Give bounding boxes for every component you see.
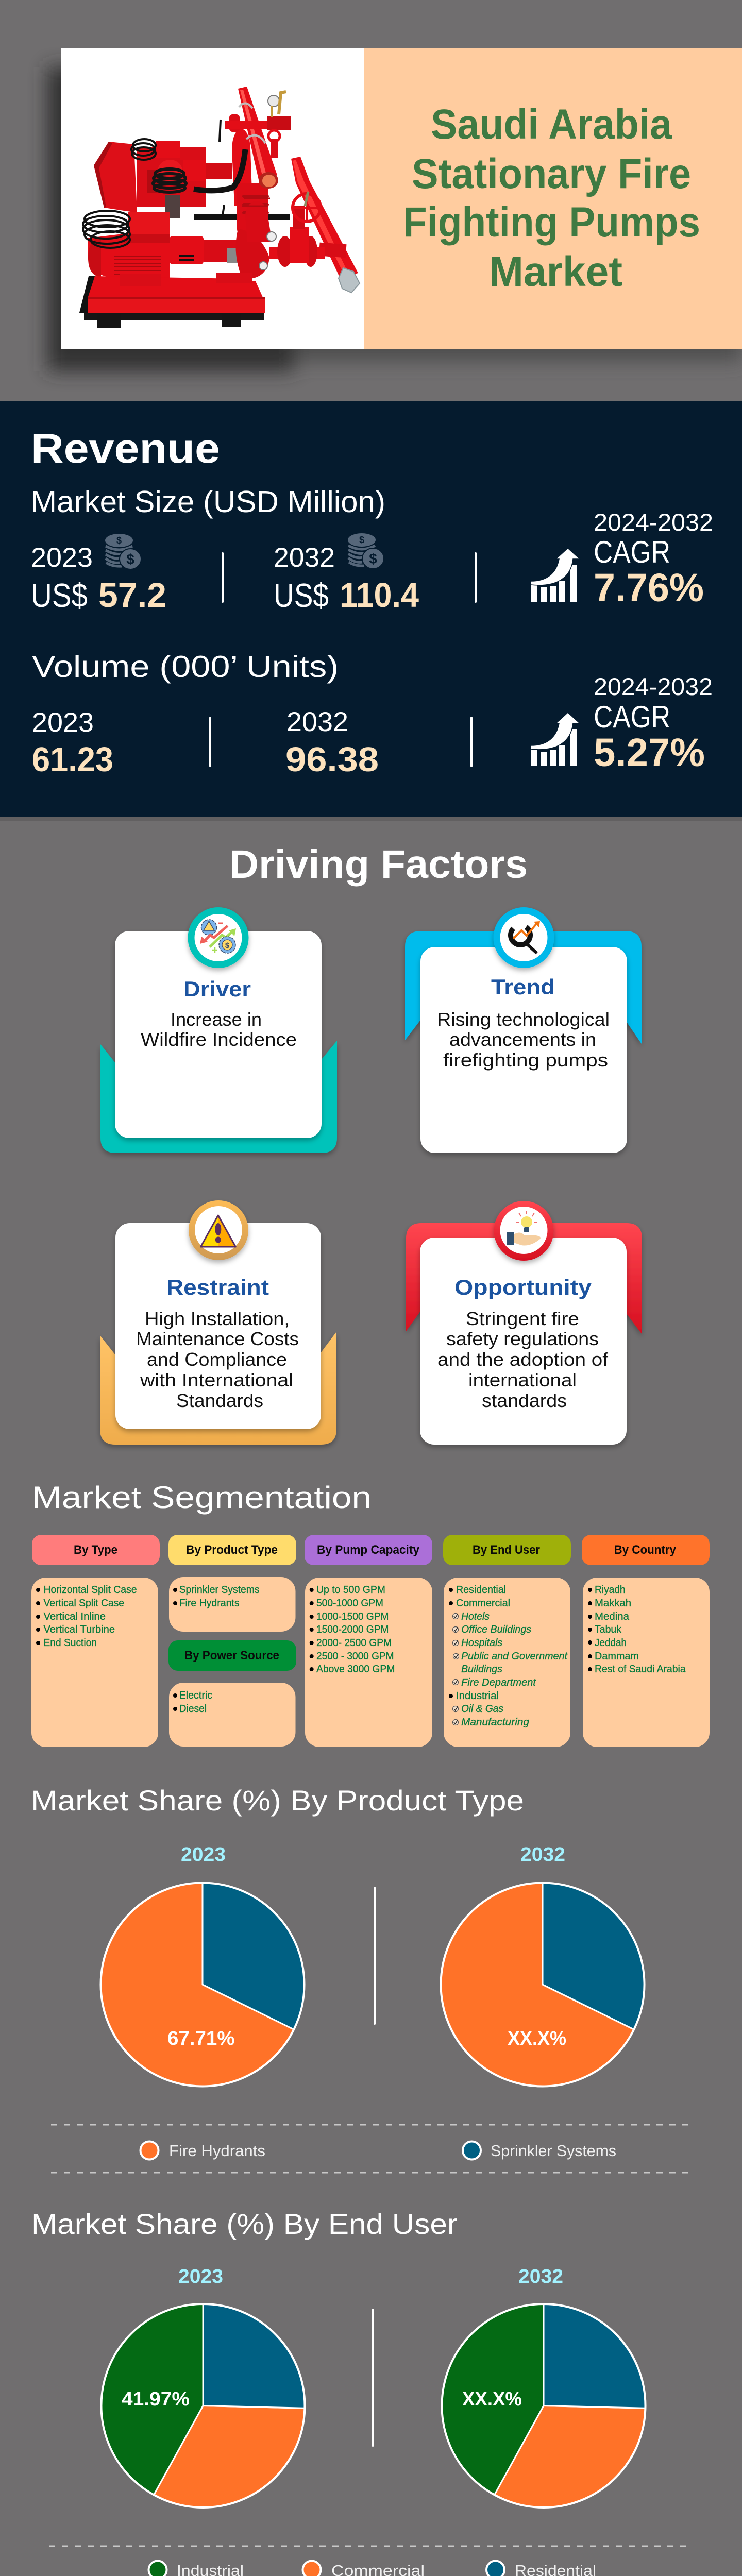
title text: Stationary Fire	[412, 150, 691, 197]
panel: by product type	[168, 1535, 296, 1632]
icon: trend	[494, 907, 554, 968]
title text: Fighting Pumps	[403, 199, 700, 246]
list: capacity items: Up to 500 GPM	[316, 1584, 385, 1596]
card text: Increase in	[171, 1009, 262, 1030]
stat: volume 2023: 2023	[32, 707, 94, 738]
list: power items: Electric	[179, 1690, 212, 1701]
card title: Opportunity	[454, 1275, 592, 1299]
stat: revenue CAGR: CAGR	[594, 535, 670, 569]
stat: volume 2032: 2032	[286, 707, 348, 737]
card text	[141, 1009, 297, 1050]
card title: Driver	[183, 977, 251, 1001]
icon: coins: $	[369, 551, 377, 567]
list: capacity items: 500-1000 GPM	[316, 1598, 383, 1609]
stat: revenue CAGR: 2024-2032	[594, 509, 713, 536]
chart: product type 2023	[101, 1844, 304, 2086]
header label: By Country	[614, 1543, 677, 1557]
chart: product type 2032	[441, 1844, 644, 2086]
stat: market size 2023: US$	[31, 577, 88, 614]
pie	[442, 2304, 645, 2507]
card text: safety regulations	[446, 1328, 599, 1349]
card text: and the adoption of	[437, 1349, 609, 1370]
list: power items	[173, 1690, 212, 1715]
header label: By Type	[74, 1543, 117, 1557]
list: power items: Diesel	[179, 1703, 207, 1715]
stat: volume 2023: 61.23	[32, 740, 113, 779]
card text: firefighting pumps	[443, 1049, 608, 1071]
heading: market size: Market Size (USD Million)	[31, 485, 385, 519]
list: type items: Vertical Turbine	[43, 1624, 115, 1635]
panel: driver	[100, 907, 337, 1153]
heading: driving factors: Driving Factors	[229, 842, 528, 887]
card text: with International	[140, 1369, 293, 1391]
list: country items: Dammam	[595, 1651, 639, 1662]
list: product items: Sprinkler Systems	[179, 1584, 260, 1596]
stat: volume CAGR: 2024-2032	[594, 673, 713, 700]
panel: restraint	[100, 1200, 336, 1445]
heading: market share by product type: Market Share (%) By Product Type	[31, 1784, 524, 1817]
card text: international	[468, 1369, 577, 1391]
list: end user items: Oil & Gas	[461, 1703, 503, 1715]
heading: volume: Volume (000’ Units)	[32, 650, 339, 684]
list: product items	[173, 1584, 260, 1609]
value label: XX.X%	[508, 2028, 566, 2049]
icon: growth chart	[531, 548, 580, 602]
title panel	[364, 48, 742, 349]
list: country items: Jeddah	[595, 1637, 627, 1649]
list: country items: Rest of Saudi Arabia	[595, 1664, 686, 1675]
product photo panel	[61, 48, 364, 349]
heading: revenue: Revenue	[31, 426, 220, 472]
card text	[437, 1009, 610, 1071]
stat: market size 2023: 2023	[31, 543, 93, 573]
title text: Market	[489, 248, 622, 295]
list: type items: Vertical Split Case	[43, 1598, 124, 1609]
card text	[136, 1308, 299, 1411]
chart: end user 2032	[442, 2266, 645, 2507]
pie	[441, 1883, 644, 2086]
icon: driver: $	[225, 941, 230, 950]
card text: standards	[482, 1390, 567, 1411]
list: country items: Riyadh	[595, 1584, 626, 1596]
stat: market size 2032: 110.4	[340, 576, 419, 615]
panel: revenue	[0, 401, 742, 817]
list: end user items: Industrial	[456, 1690, 499, 1702]
value label: 67.71%	[167, 2028, 235, 2049]
list: capacity items: 2000- 2500 GPM	[316, 1637, 392, 1649]
stat: revenue CAGR	[594, 509, 713, 610]
card text: Maintenance Costs	[136, 1328, 299, 1349]
list: country items: Tabuk	[595, 1624, 622, 1635]
heading: market segmentation: Market Segmentation	[32, 1480, 372, 1515]
list: type items	[36, 1584, 137, 1649]
stat: revenue CAGR: 7.76%	[594, 566, 704, 610]
header label: By Pump Capacity	[317, 1543, 420, 1557]
card text: advancements in	[449, 1029, 596, 1050]
year label: 2023	[181, 1844, 226, 1866]
list: type items: Vertical Inline	[43, 1611, 106, 1622]
stat: volume CAGR	[594, 673, 713, 775]
icon: coins	[348, 533, 384, 569]
year label: 2023	[178, 2266, 223, 2287]
list: end user items: Residential	[456, 1584, 506, 1596]
title text: Saudi Arabia	[431, 101, 672, 148]
legend: product type: Sprinkler Systems	[491, 2142, 616, 2160]
pie	[102, 2304, 305, 2507]
stat: market size 2032: US$	[274, 577, 329, 614]
hero banner	[47, 48, 742, 371]
card text: Rising technological	[437, 1009, 610, 1030]
list: end user items: Office Buildings	[461, 1624, 531, 1635]
list: type items: End Suction	[43, 1637, 97, 1649]
header label: By End User	[473, 1543, 540, 1557]
year label: 2032	[520, 1844, 565, 1866]
list: end user items: Public and Government	[461, 1651, 568, 1662]
list: type items: Horizontal Split Case	[43, 1584, 137, 1596]
icon: coins: $	[359, 535, 364, 545]
panel: by pump capacity	[305, 1535, 432, 1747]
hero shadow	[47, 67, 742, 371]
panel: by power source	[168, 1640, 296, 1747]
stat: volume CAGR: 5.27%	[594, 731, 705, 775]
stat: market size 2023: 57.2	[98, 576, 166, 615]
year label: 2032	[518, 2266, 563, 2287]
header label: By Power Source	[184, 1649, 279, 1663]
value label: XX.X%	[462, 2388, 522, 2410]
divider	[209, 717, 211, 767]
icon: coins	[105, 534, 141, 569]
panel: by end user	[443, 1535, 571, 1747]
list: end user items: Hotels	[461, 1611, 490, 1622]
icon: restraint	[189, 1200, 248, 1260]
panel: trend	[405, 907, 642, 1153]
divider	[372, 2309, 374, 2447]
divider	[374, 1887, 376, 2025]
list: end user items: Hospitals	[461, 1637, 502, 1649]
stat: market size 2023	[31, 534, 166, 615]
list: capacity items: 2500 - 3000 GPM	[316, 1651, 394, 1662]
list: capacity items: Above 3000 GPM	[316, 1664, 395, 1675]
list: capacity items: 1500-2000 GPM	[316, 1624, 389, 1635]
list: end user items	[449, 1584, 568, 1728]
divider	[475, 552, 477, 603]
card text: Stringent fire	[466, 1308, 579, 1329]
stat: volume 2032: 96.38	[285, 740, 379, 779]
list: end user items: Fire Department	[461, 1677, 536, 1688]
list: country items: Makkah	[595, 1598, 631, 1609]
card text	[437, 1308, 609, 1411]
stat: volume 2032	[285, 707, 379, 779]
legend: end user	[148, 2561, 596, 2576]
list: end user items: Buildings	[461, 1664, 502, 1675]
stat: volume CAGR: CAGR	[594, 700, 670, 734]
list: product items: Fire Hydrants	[179, 1598, 240, 1609]
panel: by type	[31, 1535, 160, 1747]
panel: opportunity	[406, 1201, 642, 1445]
stat: market size 2032: 2032	[274, 543, 335, 573]
illustration: red fire pump skid	[79, 87, 360, 328]
panel: by country	[582, 1535, 710, 1747]
header label: By Product Type	[186, 1543, 278, 1557]
title text	[403, 101, 700, 295]
card text: and Compliance	[147, 1349, 287, 1370]
list: end user items: Commercial	[456, 1598, 510, 1609]
card text: Wildfire Incidence	[141, 1029, 297, 1050]
icon: opportunity	[494, 1201, 553, 1261]
icon: driver	[188, 907, 248, 968]
legend: product type	[140, 2141, 616, 2160]
card title: Restraint	[166, 1275, 269, 1299]
list: country items: Medina	[595, 1611, 630, 1622]
stat: market size 2032	[274, 533, 419, 615]
divider	[470, 717, 473, 767]
list: end user items: Manufacturing	[461, 1717, 529, 1728]
heading: market share by end user: Market Share (%) By End User	[31, 2208, 458, 2240]
icon: coins: $	[126, 551, 134, 567]
stat: volume 2023	[32, 707, 113, 779]
value label: 41.97%	[122, 2388, 190, 2410]
list: country items	[588, 1584, 686, 1675]
card title: Trend	[491, 975, 555, 999]
icon: coins: $	[116, 535, 122, 546]
list: capacity items	[310, 1584, 395, 1675]
icon: growth chart	[531, 713, 580, 766]
pie	[101, 1883, 304, 2086]
divider	[222, 552, 224, 603]
list: capacity items: 1000-1500 GPM	[316, 1611, 389, 1622]
card text: Standards	[176, 1390, 263, 1411]
legend: product type: Fire Hydrants	[169, 2142, 265, 2160]
card text: High Installation,	[145, 1308, 290, 1329]
chart: end user 2023	[102, 2266, 305, 2507]
